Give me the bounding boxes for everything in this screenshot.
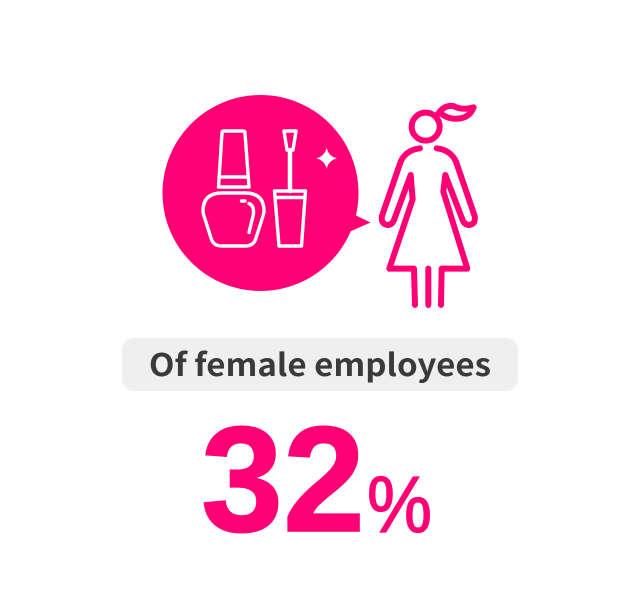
value: 32: 32 [201,395,365,563]
speech bubble [162,95,370,291]
label: Of female employees: Of female employees [149,340,491,385]
icon: sparkle [316,148,337,169]
label background [122,338,518,391]
icon: nail polish bottle [203,131,264,246]
icon: woman figure [382,106,475,305]
value: percent sign: % [367,460,432,549]
icon: nail polish brush [274,131,306,246]
